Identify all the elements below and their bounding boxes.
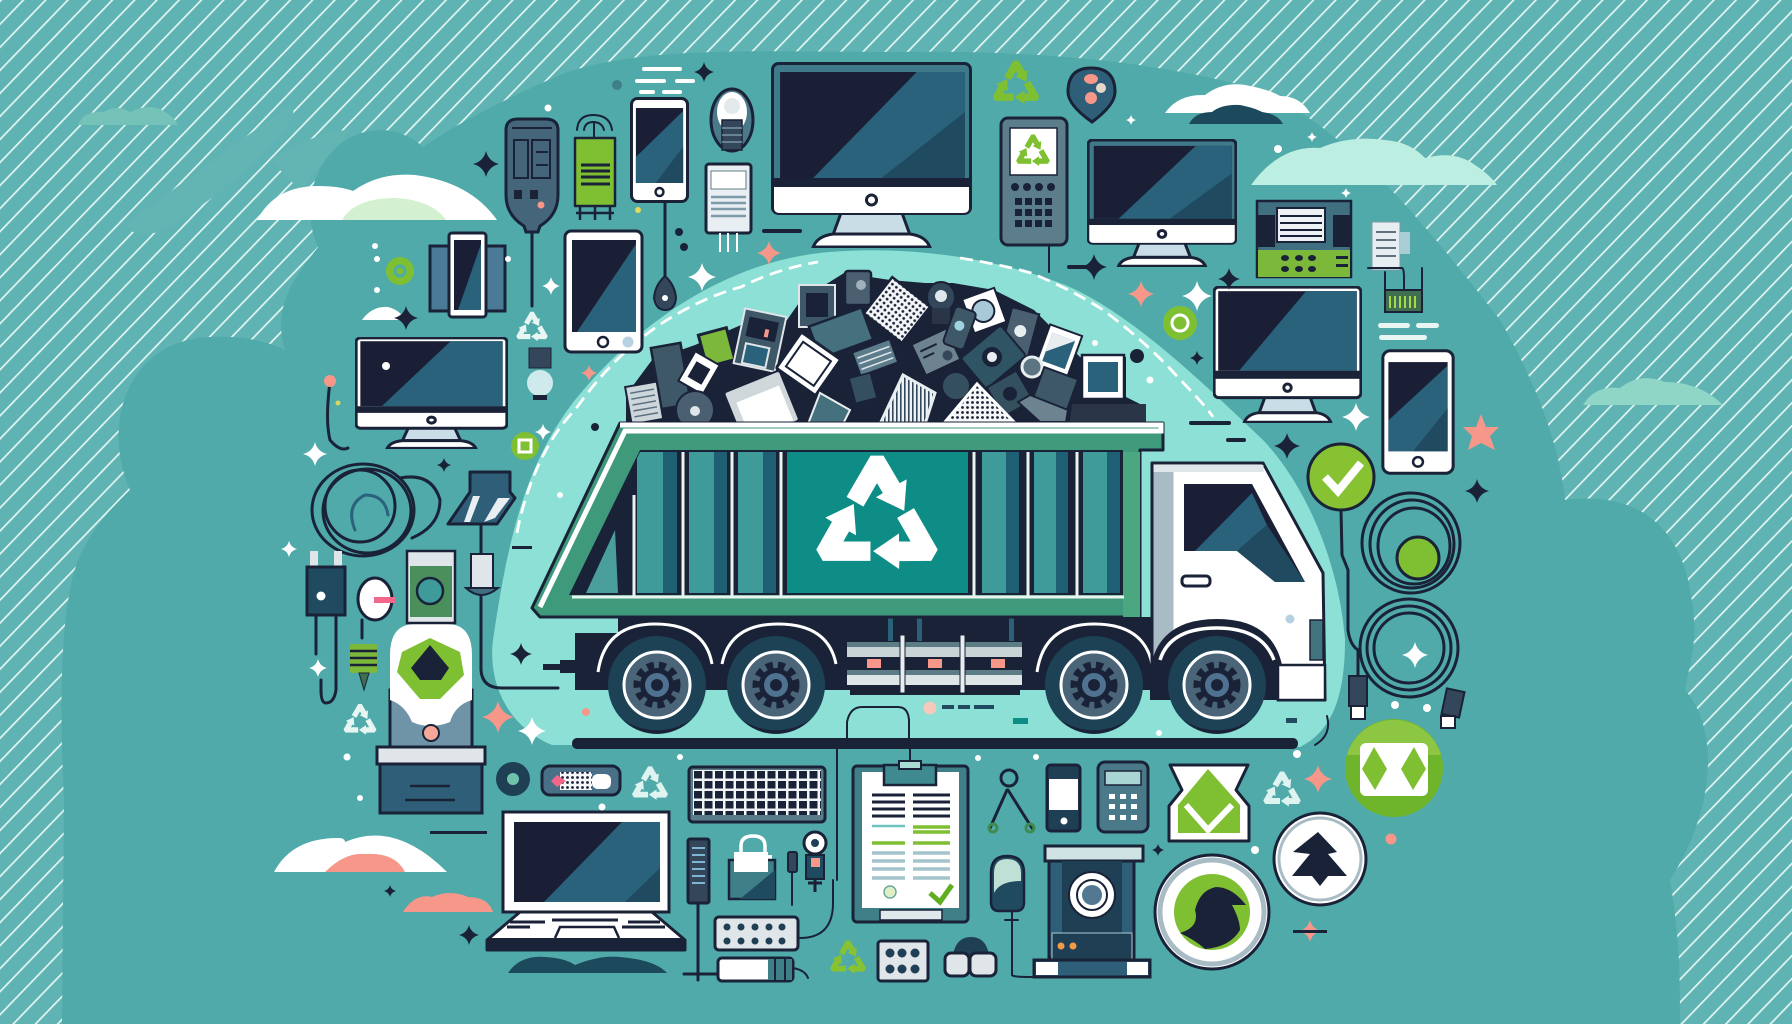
cloud: pale mint right	[1251, 139, 1497, 185]
rear plug	[543, 660, 580, 673]
chassis posts	[888, 617, 1014, 641]
cloud: salmon	[403, 893, 493, 912]
desk lamp device	[448, 472, 558, 688]
small dark device	[849, 373, 877, 403]
envelope check	[1169, 765, 1249, 841]
bulb icon left	[527, 348, 553, 400]
white frame photo	[1035, 324, 1082, 377]
white recycle left low	[340, 704, 380, 738]
green recycling symbol top	[988, 61, 1044, 109]
small phone	[1047, 765, 1080, 831]
chassis	[575, 617, 1154, 695]
wheels	[608, 636, 1266, 734]
faint brush strokes upper left	[125, 105, 350, 234]
white tablet tilted	[776, 332, 841, 396]
tall strip device	[684, 839, 718, 980]
clouds	[78, 84, 1723, 912]
tablet	[565, 231, 642, 352]
toggle pill	[542, 766, 620, 795]
light dome behind truck	[492, 250, 1345, 747]
door handle	[1182, 576, 1210, 586]
bag cluster	[945, 937, 996, 976]
salmon star	[1463, 414, 1499, 450]
white recycle lower right	[1260, 772, 1304, 810]
marker light and panel	[1286, 614, 1323, 660]
cable coil with sparkle	[1360, 599, 1458, 697]
recycling symbol	[805, 456, 950, 582]
gauge device	[804, 832, 826, 892]
fenders	[598, 624, 1152, 672]
dark hills under laptop	[508, 957, 667, 973]
white monitor in pile	[724, 370, 800, 443]
check circle and cable	[1308, 444, 1374, 675]
white-gray wedge	[1018, 395, 1068, 422]
speaker box	[1001, 307, 1039, 357]
hatched tablet	[880, 375, 935, 424]
recycling kiosk	[377, 551, 485, 813]
small speaker top	[845, 271, 871, 305]
dark tablet	[651, 343, 691, 409]
bumper	[1278, 665, 1325, 700]
ring	[496, 762, 530, 796]
small green coil	[350, 644, 377, 690]
hose connector	[358, 578, 395, 638]
grill panel	[852, 339, 898, 376]
gray block low right	[987, 371, 1033, 417]
cloud: white top	[1165, 84, 1310, 124]
washing machine unit	[1034, 846, 1150, 977]
hatched white panel	[945, 384, 1014, 422]
pile silhouette	[626, 273, 1146, 422]
disc	[676, 391, 714, 429]
blue-gray wedge with UA mark	[1030, 367, 1078, 419]
map pin	[1068, 68, 1115, 122]
cloud: faint far right	[1583, 378, 1723, 405]
dashed arc around load	[517, 258, 1213, 533]
dark disc	[942, 372, 970, 400]
recycling circle badge	[1274, 813, 1366, 905]
dump body	[532, 423, 1163, 617]
power plug	[307, 551, 345, 703]
device pile on truck	[625, 271, 1146, 443]
camera	[927, 282, 955, 324]
small green square icon	[511, 432, 539, 460]
inner dark panel	[569, 450, 1123, 595]
locked folder	[729, 836, 775, 899]
dark battery	[1070, 404, 1146, 422]
white recycle left	[513, 312, 551, 344]
button pad	[878, 941, 928, 981]
dome hook stroke	[1315, 716, 1328, 745]
big green circle icon	[1345, 719, 1443, 817]
cloud: small white arc	[362, 307, 405, 320]
top white rail	[540, 425, 1161, 607]
recycling panel	[787, 452, 968, 593]
green recycle bottom	[827, 940, 870, 978]
cab window	[1184, 484, 1305, 582]
right phone	[1383, 351, 1453, 473]
document and router	[1368, 222, 1422, 312]
green ring icon	[1163, 306, 1197, 340]
dark ring device	[942, 305, 977, 350]
silver tanks	[847, 635, 1022, 693]
oval badge device	[711, 89, 753, 151]
keyboard	[689, 767, 825, 822]
power strip	[715, 917, 798, 950]
cable coil left	[312, 464, 440, 556]
calculator	[1098, 762, 1148, 832]
dashes above phone	[612, 67, 695, 94]
striped paper	[625, 381, 663, 424]
cloud: white upper left	[257, 175, 497, 220]
white recycle bottom	[629, 766, 672, 804]
white frame device	[678, 351, 720, 395]
capsule	[718, 958, 808, 981]
phone top	[631, 98, 688, 310]
perforated panel	[864, 277, 930, 343]
cable under truck	[800, 707, 910, 938]
cloud: white and salmon lower left	[274, 835, 447, 872]
large dark speaker	[961, 325, 1026, 389]
gray block	[912, 329, 960, 375]
paper module	[706, 164, 751, 252]
cable coil with green centre	[1362, 493, 1460, 593]
padlock pendant	[991, 856, 1032, 977]
white dashes by right phone	[1378, 323, 1439, 340]
dashes under truck	[924, 702, 1297, 724]
ground line	[572, 738, 1298, 749]
clipboard checklist	[853, 761, 968, 922]
pliers	[989, 770, 1034, 832]
ring	[1022, 357, 1042, 377]
G badge	[1155, 855, 1269, 969]
cab	[1150, 463, 1325, 700]
USB plugs	[1349, 676, 1465, 728]
green device with antenna	[575, 115, 615, 220]
framed small display	[1082, 355, 1124, 399]
sparkles and dots	[281, 62, 1499, 945]
keypad device	[1001, 118, 1067, 272]
floppy module	[734, 308, 786, 372]
small device	[808, 393, 850, 424]
monitor left	[356, 338, 507, 448]
narrow phone with side panels	[430, 233, 505, 317]
white slat lines	[572, 452, 1124, 597]
circuit board	[1257, 201, 1351, 277]
monitor upper right	[1088, 140, 1236, 266]
big monitor	[773, 64, 970, 247]
slats	[586, 452, 1120, 593]
small plug and cable	[788, 852, 797, 905]
gray tablet	[809, 307, 873, 359]
laptop	[487, 812, 685, 950]
recycling truck	[532, 423, 1325, 734]
cloud: faint left	[78, 107, 178, 125]
USB remote device	[506, 119, 558, 306]
monitor right	[1214, 287, 1361, 422]
small gray module	[799, 285, 835, 327]
green device	[698, 328, 735, 367]
small cable left	[324, 375, 348, 449]
cab side strip	[1154, 465, 1174, 655]
lens device white	[962, 288, 1006, 333]
wheel arch	[1150, 619, 1282, 700]
small green icon left	[386, 257, 414, 285]
